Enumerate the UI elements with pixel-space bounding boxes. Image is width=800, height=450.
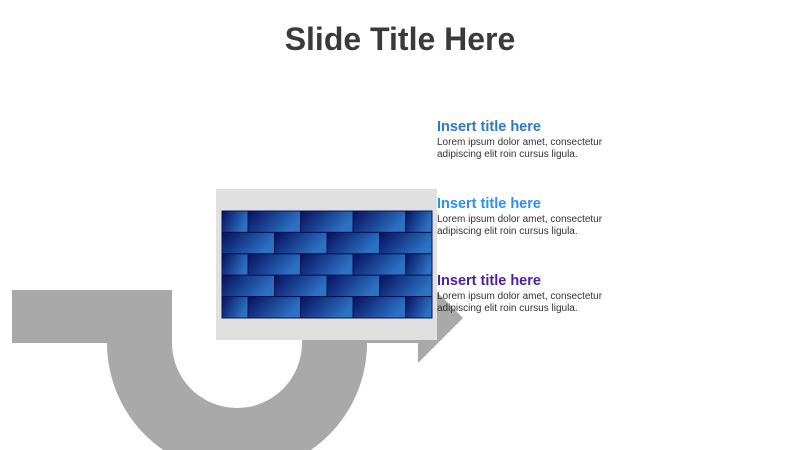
- title: Slide Title Here: [285, 21, 515, 57]
- text block 3: Lorem ipsum dolor amet, consectetur: [437, 291, 602, 302]
- arrow: U-shaped pipe: [12, 273, 463, 450]
- text block 1: [437, 119, 602, 160]
- text block 2: [437, 196, 602, 237]
- text block 2: adipiscing elit roin cursus ligula.: [437, 226, 578, 237]
- text block 1: adipiscing elit roin cursus ligula.: [437, 149, 578, 160]
- brick wall panel: [216, 189, 437, 340]
- text block 3: Insert title here: [437, 273, 541, 289]
- text block 2: Insert title here: [437, 196, 541, 212]
- text block 3: adipiscing elit roin cursus ligula.: [437, 303, 578, 314]
- text block 3: [437, 273, 602, 314]
- text block 1: Lorem ipsum dolor amet, consectetur: [437, 137, 602, 148]
- text block 2: Lorem ipsum dolor amet, consectetur: [437, 214, 602, 225]
- text block 1: Insert title here: [437, 119, 541, 135]
